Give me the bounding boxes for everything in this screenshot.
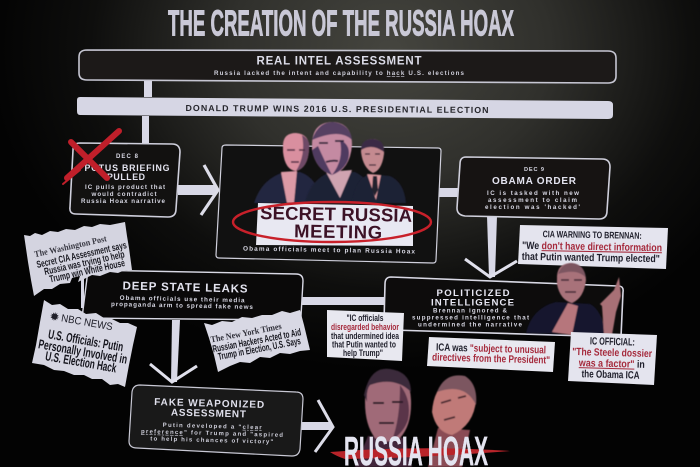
heading: fake weaponized assessment: ASSESSMENT: [171, 408, 246, 420]
heading: potus briefing pulled: POTUS BRIEFING: [84, 163, 170, 173]
text: briefing description: would contradict: [90, 191, 156, 198]
callout: ICA directives: directives from the President": [432, 351, 550, 367]
callout: ICA directives: ICA was "subject to unusual: [436, 342, 546, 356]
heading: politicized intelligence: INTELLIGENCE: [431, 298, 515, 308]
text: leaks description: [111, 295, 254, 311]
figure: clapper: [254, 133, 322, 203]
arrow: order to politicized: [465, 259, 517, 277]
figure: comey: [352, 139, 406, 203]
clipping: nbc news: U.S. Officials: Putin: [47, 326, 125, 354]
text: assessment description: to help his chances of victory": [150, 436, 274, 446]
panel: secret russia meeting: [216, 122, 441, 263]
arrow: briefing to meeting: [201, 165, 218, 215]
panel: potus briefing pulled: [70, 143, 180, 217]
figure: schiff: [355, 369, 412, 467]
callout: IC officials: help Trump": [343, 348, 383, 358]
clipping: nbc news: NBC NEWS: [60, 312, 114, 333]
text: assessment description: [141, 422, 284, 446]
label: secret russia meeting: [256, 202, 413, 246]
callout: IC officials: "IC officials: [346, 313, 384, 323]
figure: brennan: [526, 263, 621, 335]
heading: potus briefing pulled: PULLED: [107, 172, 145, 182]
panel: real intel assessment: [79, 50, 616, 83]
clipping: nbc news: Personally Involved in: [37, 336, 128, 367]
text: order description: election was 'hacked': [485, 204, 581, 211]
heading: fake weaponized assessment: FAKE WEAPONIZED: [154, 397, 264, 411]
clipping: washington post: Russia was trying to help: [43, 249, 126, 278]
callout: IC officials: disregarded behavior: [331, 322, 399, 332]
heading: deep state leaks: DEEP STATE LEAKS: [122, 280, 248, 296]
text: dec 9: DEC 9: [524, 167, 544, 173]
banner: Trump wins: DONALD TRUMP WINS 2016 U.S. PRESIDENTIAL ELECTION: [185, 103, 489, 115]
callout: ICA directives: [427, 337, 555, 372]
text: briefing description: Russia Hoax narrative: [81, 198, 166, 205]
clipping: new york times: Russian Hackers Acted to Aid: [212, 327, 302, 355]
callout: IC officials: [327, 310, 404, 361]
figure: mueller: [428, 375, 476, 467]
callout: CIA warning: CIA WARNING TO BRENNAN:: [543, 228, 642, 241]
heading: politicized intelligence: POLITICIZED: [436, 288, 510, 299]
text: order description: assessment to claim: [488, 197, 577, 204]
text: leaks description: Obama officials use their media: [120, 295, 245, 304]
clipping: washington post: [24, 222, 132, 296]
text: assessment description: preference" for Trump and "aspired: [141, 429, 283, 439]
heading: real intel assessment: REAL INTEL ASSESSMENT: [256, 56, 422, 68]
clipping: washington post: Trump win White House: [49, 258, 126, 285]
heading: obama order: OBAMA ORDER: [492, 176, 577, 187]
text: order description: IC is tasked with new: [487, 190, 579, 197]
text: leaks description: propaganda arm to spread fake news: [111, 301, 254, 311]
text: assessment description: Putin developed a "clear: [163, 423, 262, 431]
callout: IC officials: that Putin wanted to: [332, 340, 396, 350]
arrow: assessment to hoax: [315, 400, 333, 452]
callout: CIA warning: "We don't have direct information: [522, 240, 662, 254]
icon: nbc peacock: ✹: [48, 310, 60, 324]
arrow: leaks to assessment: [150, 364, 197, 382]
callout: IC official steele: "The Steele dossier: [572, 346, 652, 360]
panel: deep state leaks: [82, 270, 303, 320]
callout: CIA warning: [518, 225, 668, 269]
label: secret russia meeting: SECRET RUSSIA: [260, 202, 412, 226]
icon: red X: [63, 131, 119, 184]
callout: IC official steele: IC OFFICIAL:: [590, 335, 635, 349]
banner: Trump wins: [77, 97, 613, 119]
figure: obama: [305, 122, 378, 203]
clipping: new york times: The New York Times: [210, 321, 283, 345]
clipping: new york times: [204, 310, 310, 372]
icon: red stroke: [330, 448, 510, 459]
label: secret russia meeting: MEETING: [294, 220, 382, 243]
text: real intel subtitle: Russia lacked the intent and capability to hack U.S. elections: [214, 70, 465, 77]
callout: IC officials: that undermined idea: [331, 331, 400, 341]
callout: IC official steele: the Obama ICA: [581, 368, 640, 382]
callout: CIA warning: that Putin wanted Trump elected": [522, 251, 660, 265]
text: briefing description: IC pulls product that: [85, 184, 165, 191]
clipping: nbc news: U.S. Election Hack: [44, 348, 118, 376]
icon: red circle: [233, 202, 431, 242]
clipping: washington post: Secret CIA Assessment says: [36, 240, 128, 271]
clipping: washington post: The Washington Post: [33, 233, 108, 259]
text: dec 8: DEC 8: [116, 154, 139, 160]
text: meeting caption: Obama officials meet to plan Russia Hoax: [243, 245, 416, 256]
connectors: [81, 81, 497, 430]
panel: politicized intelligence: [384, 263, 623, 337]
text: politicized description: undermined the narrative: [418, 322, 523, 328]
heading: fake weaponized assessment: [154, 397, 264, 421]
text: politicized description: Brennan ignored &: [433, 308, 508, 314]
clipping: new york times: Trump in Election, U.S. Says: [217, 336, 302, 363]
callout: IC official steele: was a factor" in: [578, 357, 645, 371]
callout: IC official steele: [568, 332, 657, 385]
panel: fake weaponized assessment: [129, 385, 303, 456]
text: politicized description: suppressed intelligence that: [412, 314, 529, 322]
panel: obama order: [457, 157, 610, 219]
clipping: nbc news: [32, 300, 137, 387]
